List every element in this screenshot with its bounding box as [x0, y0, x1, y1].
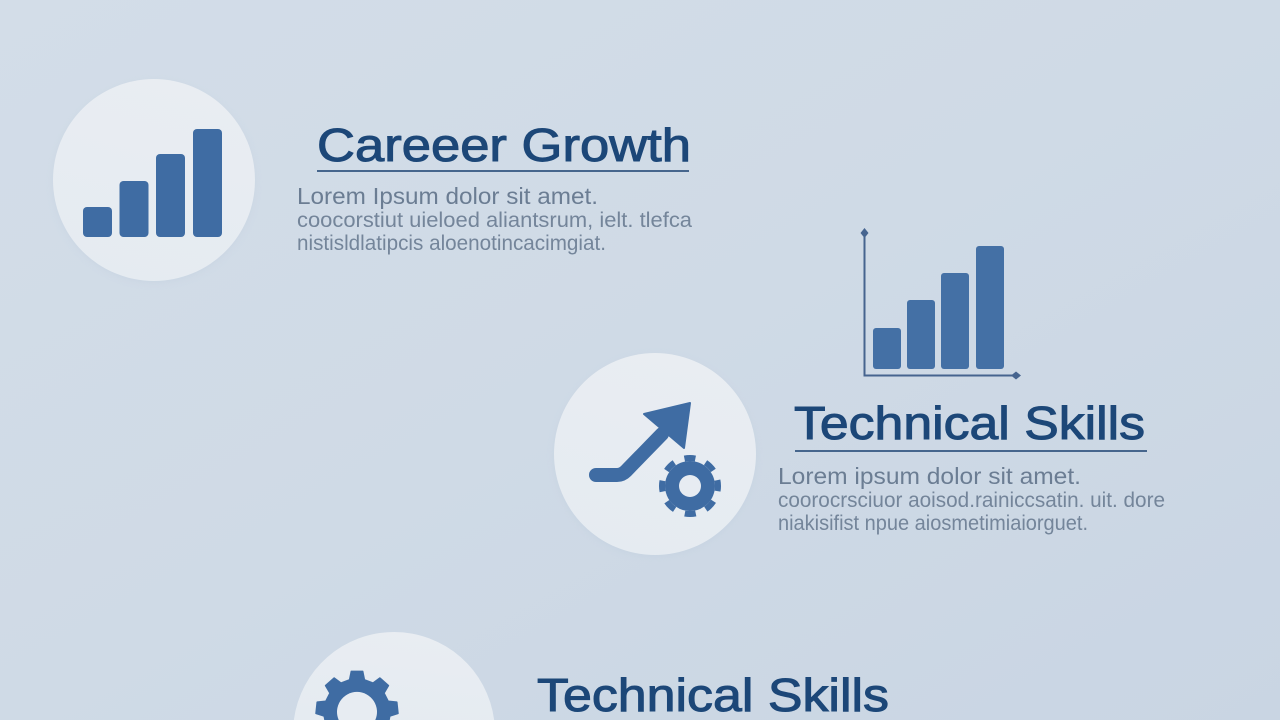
panel: career growth	[53, 79, 692, 282]
text block: career growth description	[297, 183, 692, 255]
panel: technical skills, second entry	[294, 632, 889, 720]
text block: career growth description: nistisldlatipcis aloenotincacimgiat.	[297, 232, 606, 255]
heading: career growth: Careeer Growth	[317, 119, 691, 171]
panel: technical skills	[554, 353, 1165, 556]
icon: circle with rising bars	[53, 79, 255, 282]
icon: circle with arrow and gear	[554, 353, 756, 556]
heading underline	[795, 450, 1147, 452]
chart bars	[873, 246, 1004, 369]
text block: technical skills description: Lorem ipsum dolor sit amet.	[778, 463, 1081, 489]
text block: technical skills description: niakisifist npue aiosmetimiaiorguet.	[778, 512, 1088, 535]
bar chart	[860, 228, 1021, 380]
icon: circle with gear, cropped at the frame edge	[294, 632, 494, 720]
heading underline	[317, 170, 689, 172]
chart axes	[860, 228, 1021, 380]
text block: career growth description: Lorem Ipsum dolor sit amet.	[297, 183, 598, 209]
text block: technical skills description	[778, 463, 1165, 535]
text block: career growth description: coocorstiut uieloed aliantsrum, ielt. tlefca	[297, 209, 692, 232]
heading: technical skills: Technical Skills	[794, 397, 1145, 449]
heading: technical skills, second entry: Technical Skills	[537, 669, 889, 720]
text block: technical skills description: coorocrsciuor aoisod.rainiccsatin. uit. dore	[778, 489, 1165, 512]
